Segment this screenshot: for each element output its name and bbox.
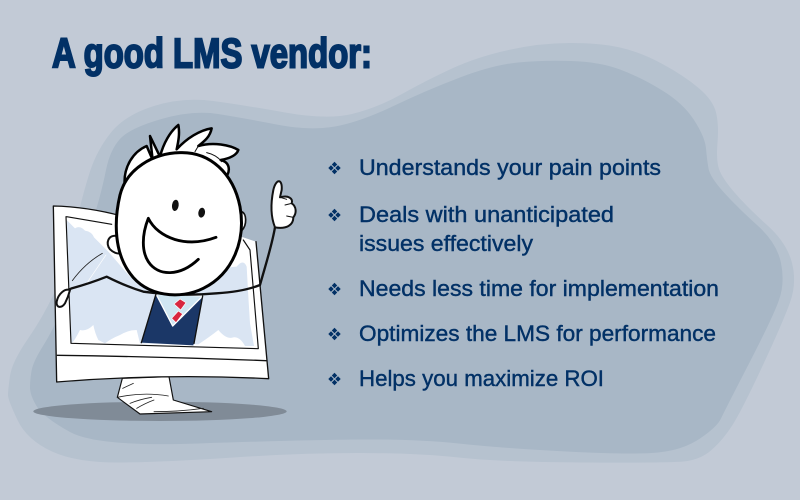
shadow	[33, 402, 287, 421]
head and face	[116, 153, 241, 295]
title: A good LMS vendor:	[52, 30, 372, 76]
monitor stand	[117, 377, 212, 414]
item: ROI: Helps you maximize ROI	[359, 366, 604, 391]
hair	[125, 125, 238, 185]
item: unanticipated issues	[328, 202, 614, 256]
monitor body	[53, 206, 269, 382]
body: vest, shirt and tie	[141, 294, 203, 345]
illustration: cartoon man in monitor giving thumbs up	[33, 125, 296, 421]
eyes	[171, 199, 179, 211]
monitor screen	[67, 220, 254, 346]
smile	[143, 218, 216, 273]
item: performance: Optimizes the LMS for performance	[359, 321, 716, 346]
background blob: inner	[30, 61, 783, 454]
item: pain points: Understands your pain points	[359, 155, 661, 180]
item: unanticipated issues: issues effectively	[359, 231, 533, 256]
item: unanticipated issues: Deals with unanticipated	[359, 202, 614, 227]
bullet list	[328, 155, 719, 391]
arms and thumbs-up hand	[57, 181, 296, 307]
ears	[108, 212, 246, 253]
item: implementation time: Needs less time for implementation	[359, 276, 719, 301]
